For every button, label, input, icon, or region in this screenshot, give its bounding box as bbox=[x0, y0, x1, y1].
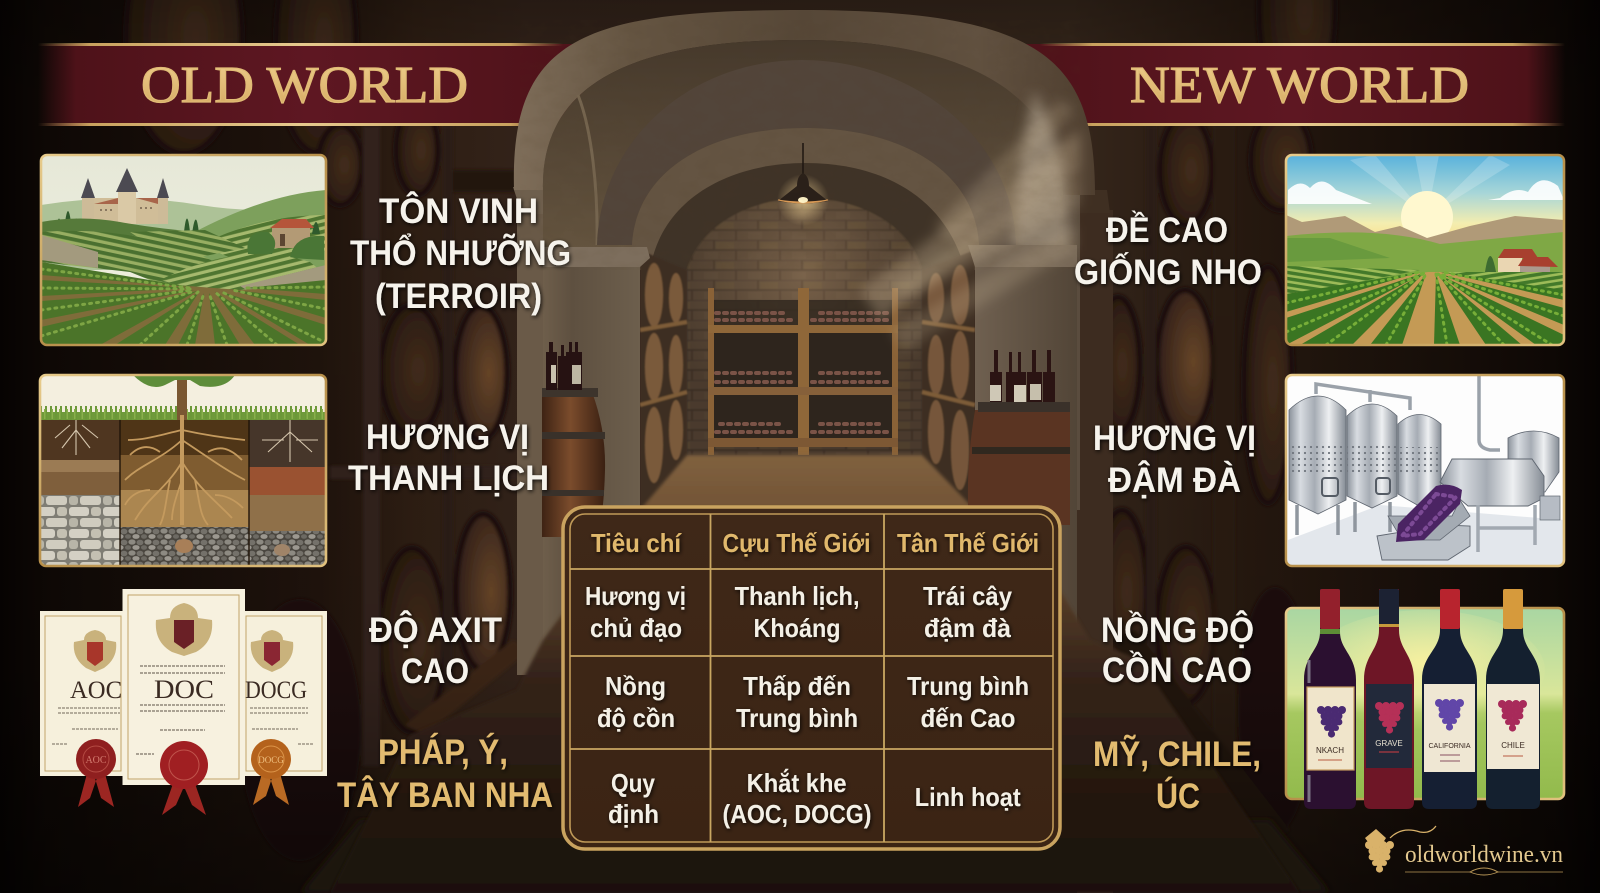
vault bbox=[543, 40, 1063, 250]
stone texture bbox=[520, 20, 1080, 270]
label: elegant flavour: HƯƠNG VỊ bbox=[366, 418, 529, 457]
table row: alcohol: Nồng bbox=[605, 671, 666, 701]
table header row: Tân Thế Giới bbox=[897, 528, 1039, 558]
certificate: AOC bbox=[40, 611, 126, 776]
table row: alcohol: đến Cao bbox=[920, 703, 1016, 733]
bottle: NKACH bbox=[1304, 589, 1356, 809]
label: bold flavour: ĐẬM ĐÀ bbox=[1108, 460, 1241, 500]
inner vault bbox=[650, 163, 965, 470]
stone piers bbox=[543, 245, 1077, 700]
label: new world countries: MỸ, CHILE, bbox=[1093, 735, 1261, 774]
fields bbox=[1287, 232, 1563, 284]
foreground vine rows bbox=[41, 262, 326, 345]
grapes bbox=[1396, 485, 1462, 542]
tank 2 bbox=[1347, 404, 1397, 532]
panel image: new world sunny vineyard bbox=[1286, 155, 1564, 345]
label: new world countries: ÚC bbox=[1156, 776, 1200, 816]
table row: regulation bbox=[608, 768, 1021, 829]
logo: oldworldwine.vn bbox=[1365, 826, 1563, 875]
label: high alcohol bbox=[1101, 610, 1254, 690]
certificate: DOCG bbox=[242, 611, 327, 776]
tank 3 bbox=[1398, 414, 1441, 506]
label: terroir: THỔ NHƯỠNG bbox=[350, 233, 571, 273]
table row: flavour: Trái cây bbox=[923, 581, 1012, 611]
wax seal: DOC bbox=[160, 741, 208, 815]
bottle: GRAVE: GRAVE bbox=[1375, 739, 1403, 748]
logo: oldworldwine.vn: oldworldwine.vn bbox=[1405, 842, 1563, 868]
label: new world countries bbox=[1093, 735, 1261, 816]
wax seal: AOC bbox=[76, 739, 116, 807]
foreground soil bbox=[1286, 272, 1564, 345]
bottle: CHILE: CHILE bbox=[1501, 741, 1525, 750]
rolling rows bbox=[1286, 266, 1420, 296]
middle arch band bbox=[597, 60, 1016, 245]
stone walls beside the aisle bbox=[543, 120, 1080, 510]
left column labels bbox=[337, 191, 571, 815]
beams left bbox=[363, 126, 380, 766]
vine rows bbox=[1286, 272, 1564, 345]
label: high acidity: ĐỘ AXIT bbox=[369, 610, 502, 650]
panel frame bbox=[1286, 608, 1564, 799]
label: bold flavour: HƯƠNG VỊ bbox=[1093, 419, 1256, 458]
table row: alcohol: độ cồn bbox=[597, 703, 675, 733]
table row: regulation: định bbox=[608, 799, 659, 829]
table header row bbox=[591, 528, 1039, 558]
mountains bbox=[1287, 216, 1563, 244]
tree foliage bbox=[133, 375, 235, 387]
label: old world countries bbox=[337, 732, 553, 815]
label: grape variety: GIỐNG NHO bbox=[1074, 252, 1262, 292]
stone walls bbox=[41, 235, 98, 268]
panel frame bbox=[1286, 155, 1564, 345]
bottle: CALIFORNIA bbox=[1422, 589, 1477, 809]
label: old world countries: TÂY BAN NHA bbox=[337, 775, 553, 815]
panel frame bbox=[40, 375, 326, 566]
lit wall wedge bbox=[1012, 92, 1070, 250]
panel image: steel tanks and grape crusher bbox=[1286, 375, 1564, 566]
hopper tank bbox=[1508, 431, 1559, 492]
sun rays bbox=[860, 100, 1080, 350]
crest bbox=[156, 603, 212, 656]
label: old world countries: PHÁP, Ý, bbox=[378, 732, 508, 772]
table row: regulation: Linh hoạt bbox=[915, 782, 1021, 812]
crusher body bbox=[1440, 459, 1544, 506]
bottle: GRAVE bbox=[1364, 589, 1414, 809]
sun rays bbox=[1350, 156, 1510, 203]
barrels behind right column bbox=[1096, 0, 1335, 830]
table row: flavour: chủ đạo bbox=[590, 613, 682, 643]
brick back wall bbox=[687, 198, 922, 455]
bottle: NKACH: NKACH bbox=[1316, 746, 1344, 755]
tree and roots bbox=[55, 378, 318, 525]
label: high acidity bbox=[369, 610, 502, 691]
side rib bbox=[578, 95, 597, 245]
side rack: left bbox=[640, 250, 687, 510]
terraced slopes bbox=[42, 231, 212, 285]
barrels behind left column bbox=[126, 0, 510, 858]
label: elegant flavour: THANH LỊCH bbox=[348, 459, 549, 498]
right column labels bbox=[1074, 210, 1262, 816]
clouds bbox=[1288, 180, 1564, 204]
crest bbox=[251, 630, 293, 672]
label: terroir bbox=[350, 191, 571, 316]
farmhouse bbox=[270, 219, 314, 248]
table row: regulation: (AOC, DOCG) bbox=[722, 799, 872, 829]
grass bbox=[40, 412, 326, 422]
table row: alcohol: Trung bình bbox=[907, 671, 1029, 701]
central cellar scene: stone arches, racks, barrels bbox=[330, 10, 1300, 893]
outer pillars bbox=[513, 187, 1113, 893]
pipes bbox=[1316, 375, 1500, 450]
table row: flavour: Khoáng bbox=[754, 613, 840, 643]
label: high alcohol: CỒN CAO bbox=[1102, 650, 1252, 690]
table header row: Tiêu chí bbox=[591, 528, 682, 558]
hopper tray bbox=[1377, 525, 1470, 560]
wax seal: DOCG: DOCG bbox=[258, 755, 284, 765]
table row: flavour bbox=[585, 581, 1012, 643]
tank 1 bbox=[1289, 396, 1346, 535]
distant hills bbox=[42, 200, 244, 270]
heading: NEW WORLD: NEW WORLD bbox=[1130, 57, 1469, 114]
banner: Old World bbox=[38, 43, 583, 126]
barrel with bottles: left bbox=[542, 342, 605, 537]
right soil column bbox=[249, 420, 326, 566]
panel image: soil cross-section bbox=[40, 375, 326, 566]
panel frame bbox=[41, 155, 326, 345]
wine rack bbox=[708, 288, 898, 455]
middle soil column bbox=[120, 420, 249, 566]
label: grape variety: ĐỀ CAO bbox=[1106, 210, 1228, 250]
floor shade bbox=[1288, 505, 1564, 566]
table row: alcohol: Trung bình bbox=[736, 703, 858, 733]
crest bbox=[74, 630, 116, 672]
floor bbox=[330, 455, 1300, 893]
bottle: CALIFORNIA: CALIFORNIA bbox=[1428, 743, 1471, 750]
label: terroir: (TERROIR) bbox=[375, 277, 542, 316]
left soil column bbox=[40, 420, 120, 566]
certificate: DOC: DOC bbox=[154, 675, 214, 704]
table row: regulation: Quy bbox=[611, 768, 655, 798]
wax seal: DOCG bbox=[251, 739, 291, 805]
panel frame bbox=[1286, 375, 1564, 566]
table row: alcohol bbox=[597, 671, 1029, 733]
table row: flavour: đậm đà bbox=[924, 613, 1012, 643]
certificate: DOCG: DOCG bbox=[245, 677, 307, 704]
panel image: green background for bottles bbox=[1286, 608, 1564, 799]
label: high acidity: CAO bbox=[401, 652, 469, 691]
bottle: CHILE bbox=[1486, 589, 1540, 809]
shrubs bbox=[42, 218, 184, 236]
side rack: right bbox=[922, 250, 975, 520]
barrel with bottles: right bbox=[968, 350, 1070, 525]
comparison table bbox=[563, 507, 1060, 849]
chateau bbox=[81, 168, 169, 224]
panel image: old world chateau vineyard bbox=[41, 155, 326, 345]
label: grape variety bbox=[1074, 210, 1262, 292]
table row: alcohol: Thấp đến bbox=[743, 671, 851, 701]
heading: OLD WORLD: OLD WORLD bbox=[141, 57, 468, 114]
banner: New World bbox=[1020, 43, 1565, 126]
wax seal: AOC: AOC bbox=[85, 755, 107, 766]
dark bottom floor bbox=[300, 820, 1330, 893]
farmhouse bbox=[1485, 249, 1558, 272]
certificate: DOC bbox=[122, 589, 245, 785]
table header row: Cựu Thế Giới bbox=[722, 528, 870, 558]
certificate: AOC: AOC bbox=[70, 677, 122, 704]
table row: regulation: Khắt khe bbox=[747, 768, 847, 798]
label: high alcohol: NỒNG ĐỘ bbox=[1101, 610, 1254, 650]
label: elegant flavour bbox=[348, 418, 549, 498]
hanging lamp bbox=[777, 143, 829, 226]
icon: grape cluster bbox=[1365, 826, 1436, 873]
table row: flavour: Thanh lịch, bbox=[735, 581, 860, 611]
cypress trees bbox=[56, 211, 320, 234]
outer arch band bbox=[514, 10, 1095, 195]
table row: flavour: Hương vị bbox=[585, 581, 686, 611]
foreground soil bbox=[41, 262, 326, 345]
label: terroir: TÔN VINH bbox=[379, 191, 538, 231]
sun bbox=[1401, 191, 1453, 243]
label: bold flavour bbox=[1093, 419, 1256, 500]
